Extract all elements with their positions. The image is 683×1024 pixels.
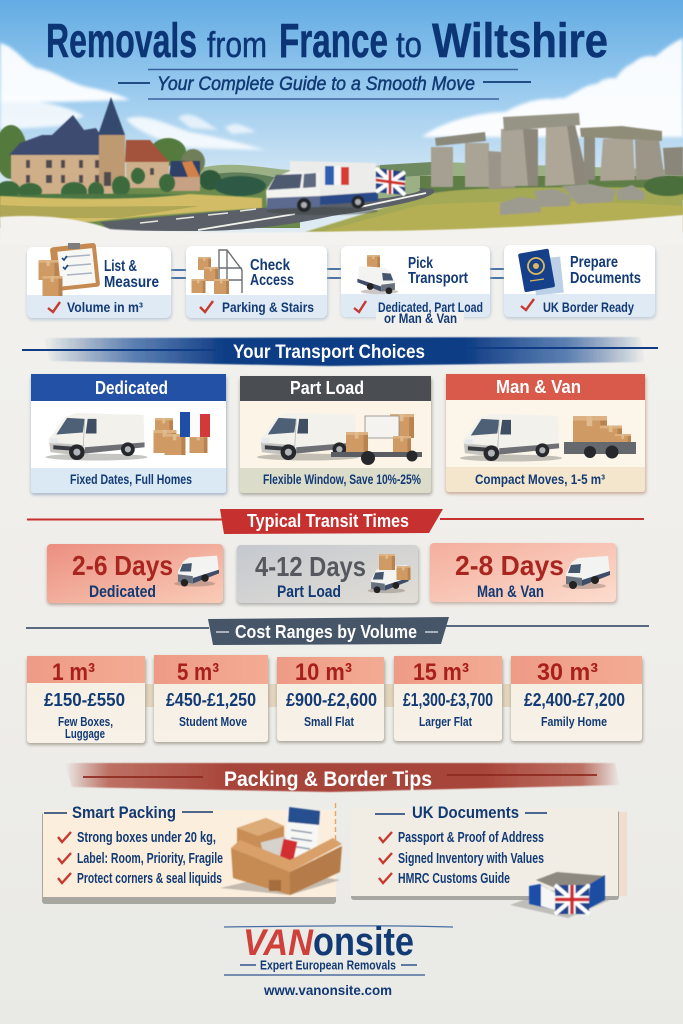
panel: transit part load: Part Load [277,582,341,601]
boulders [500,184,645,215]
step label: Transport [408,270,469,287]
icon: van with boxes [368,554,410,593]
panel: smart packing [42,803,342,904]
checklist: Signed Inventory with Values [398,851,544,867]
panel: cost 30 m3: £2,400-£7,200 [524,690,625,710]
logo [224,920,453,964]
icon: boxes and stairs [192,250,242,294]
title [46,15,608,68]
green grass right [305,187,683,232]
golden field [0,194,262,222]
checklist [58,830,223,887]
panel: cost 30 m3 [511,656,643,743]
panel: cost 1 m3: Luggage [65,726,105,741]
panel: transit dedicated: 2-6 Days [72,550,173,581]
panel: cost 5 m3: £450-£1,250 [166,690,256,710]
ground base [0,186,300,228]
panel: dedicated: Dedicated [95,378,168,398]
panel: transit man and van: 2-8 Days [455,550,564,581]
title: France [279,15,388,68]
chateau bushes [0,168,228,202]
title: Removals [46,15,197,68]
website: www.vanonsite.com [263,982,392,998]
check mark [200,301,213,312]
step label: Measure [104,274,159,291]
checklist: Protect corners & seal liquids [77,871,222,887]
heading: your transport choices: Your Transport Choices [233,341,425,363]
panel: smart packing: Smart Packing [72,803,176,822]
panel: part load: Part Load [290,378,364,398]
step label: Pick [408,255,433,272]
stonehenge [431,113,683,189]
panel: part load: Flexible Window, Save 10%-25% [263,471,421,487]
trees behind chateau [0,125,266,196]
panel: dedicated: Fixed Dates, Full Homes [70,471,192,487]
panel: cost 15 m3: 15 m³ [413,659,469,686]
panel: cost 15 m3 [394,656,503,743]
panel: step 4 prepare documents [504,245,656,319]
icon: van and trailer [460,414,636,462]
panel: cost 15 m3: Larger Flat [419,714,473,729]
heading: packing and border tips: Packing & Border Tips [224,768,432,791]
road [100,188,434,231]
step note [376,300,483,326]
step label: Access [250,272,294,289]
step connectors [171,269,504,278]
cost card connectors [145,684,511,707]
step note: or Man & Van [384,311,457,326]
dashed marker [334,803,336,845]
panel: man and van [446,374,646,494]
heading: cost ranges by volume [26,617,649,645]
step label: Prepare [570,254,618,271]
panel: cost 1 m3: Few Boxes, [58,714,113,729]
panel: cost 30 m3: 30 m³ [537,659,598,686]
panel: step 1 list and measure [27,243,172,320]
icon: french chateau [9,97,200,194]
heading: your transport choices [22,337,658,366]
step label: List & [104,258,137,275]
icon: van [174,556,219,586]
title: Wiltshire [432,15,608,68]
step label: Documents [570,270,641,287]
step note: Parking & Stairs [222,299,314,315]
subtitle: Your Complete Guide to a Smooth Move [157,74,475,95]
panel: step 2 check access [186,246,328,320]
panel: cost 5 m3: 5 m³ [177,659,219,686]
heading: cost ranges by volume: Cost Ranges by Volume [235,622,417,642]
panel: man and van: Compact Moves, 1-5 m³ [475,471,605,487]
checklist: HMRC Customs Guide [398,871,510,887]
panel: part load [240,376,432,495]
icon: clipboard and boxes [38,243,100,296]
panel: cost 5 m3: Student Move [179,714,247,729]
step label [250,257,294,289]
panel: cost 10 m3: £900-£2,600 [286,690,377,710]
logo: VAN [243,922,314,963]
icon: moving van [266,161,378,215]
step label [104,258,159,291]
paper torn edge [0,215,683,245]
check mark [521,299,534,310]
panel: uk documents [351,803,627,918]
icon: union jack flag on van [376,168,405,195]
panel: dedicated [31,374,227,495]
panel: cost 5 m3 [154,655,269,744]
panel: uk documents: UK Documents [412,803,519,822]
icon: van with boxes and french flag [46,412,210,461]
heading: packing and border tips [65,763,620,792]
panel: transit dedicated [47,544,224,605]
title: to [396,24,422,65]
panel: cost 10 m3: Small Flat [304,714,355,729]
panel: cost 10 m3 [277,657,385,743]
panel: cost 10 m3: 10 m³ [295,659,352,686]
checklist: Strong boxes under 20 kg, [77,830,216,846]
step note: Dedicated, Part Load [378,300,483,315]
checklist: Passport & Proof of Address [398,830,544,846]
panel: man and van: Man & Van [496,377,581,397]
panel: transit dedicated: Dedicated [89,582,156,601]
checklist [379,830,544,887]
check mark [48,302,60,312]
step label [570,254,641,287]
panel: cost 1 m3 [27,656,146,745]
panel: transit man and van: Man & Van [477,582,544,601]
panel: cost 1 m3: 1 m³ [52,659,95,686]
icon: van with trailer boxes [257,413,422,465]
clouds [0,38,683,150]
step note: UK Border Ready [543,299,634,315]
panel: cost 1 m3: £150-£550 [44,690,125,710]
panel: step 3 pick transport [341,246,491,326]
right bushes [644,176,683,196]
panel: cost 15 m3: £1,300-£3,700 [403,690,493,710]
icon: passport [518,249,564,295]
logo tagline: Expert European Removals [260,958,396,972]
sky [0,0,683,240]
subtitle [118,70,531,99]
icon: box with french and uk flags [510,872,610,918]
heading: typical transit times [27,509,644,534]
panel: transit part load: 4-12 Days [255,551,366,582]
heading: typical transit times: Typical Transit Times [247,511,409,531]
checklist: Label: Room, Priority, Fragile [77,851,223,867]
step label: Check [250,257,290,274]
title: from [207,24,267,65]
panel: transit part load [237,545,419,605]
icon: open box with documents [220,807,342,895]
check mark [354,301,366,312]
panel: transit man and van [430,543,617,604]
icon: van [562,556,610,589]
step label [408,255,469,287]
hero illustration [0,0,683,245]
logo: onsite [313,920,414,964]
icon: van with boxes [357,255,398,294]
panel: cost 30 m3: Family Home [541,714,607,729]
step note: Volume in m³ [67,299,143,315]
distant hills [170,162,683,205]
